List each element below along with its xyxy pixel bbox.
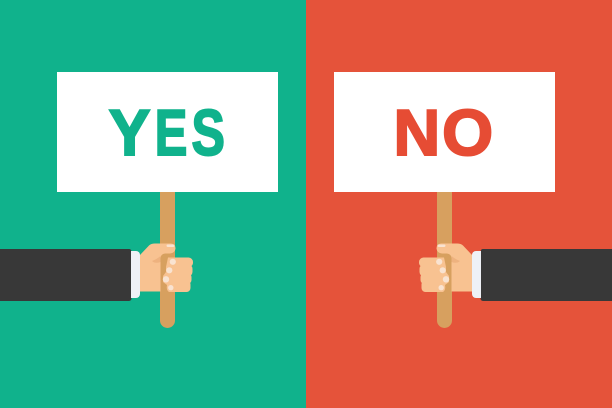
panel: yes background bbox=[0, 0, 306, 408]
yes sign: Y bbox=[109, 96, 150, 169]
yes sign: S bbox=[192, 96, 225, 169]
panel: no background bbox=[306, 0, 612, 408]
arm holding no sign pole bbox=[419, 180, 612, 328]
no sign: N bbox=[394, 96, 440, 169]
no sign bbox=[334, 72, 555, 192]
no sign: O bbox=[442, 96, 493, 169]
yes sign bbox=[57, 72, 278, 192]
arm holding yes sign pole bbox=[0, 180, 193, 328]
yes sign: E bbox=[155, 96, 187, 169]
